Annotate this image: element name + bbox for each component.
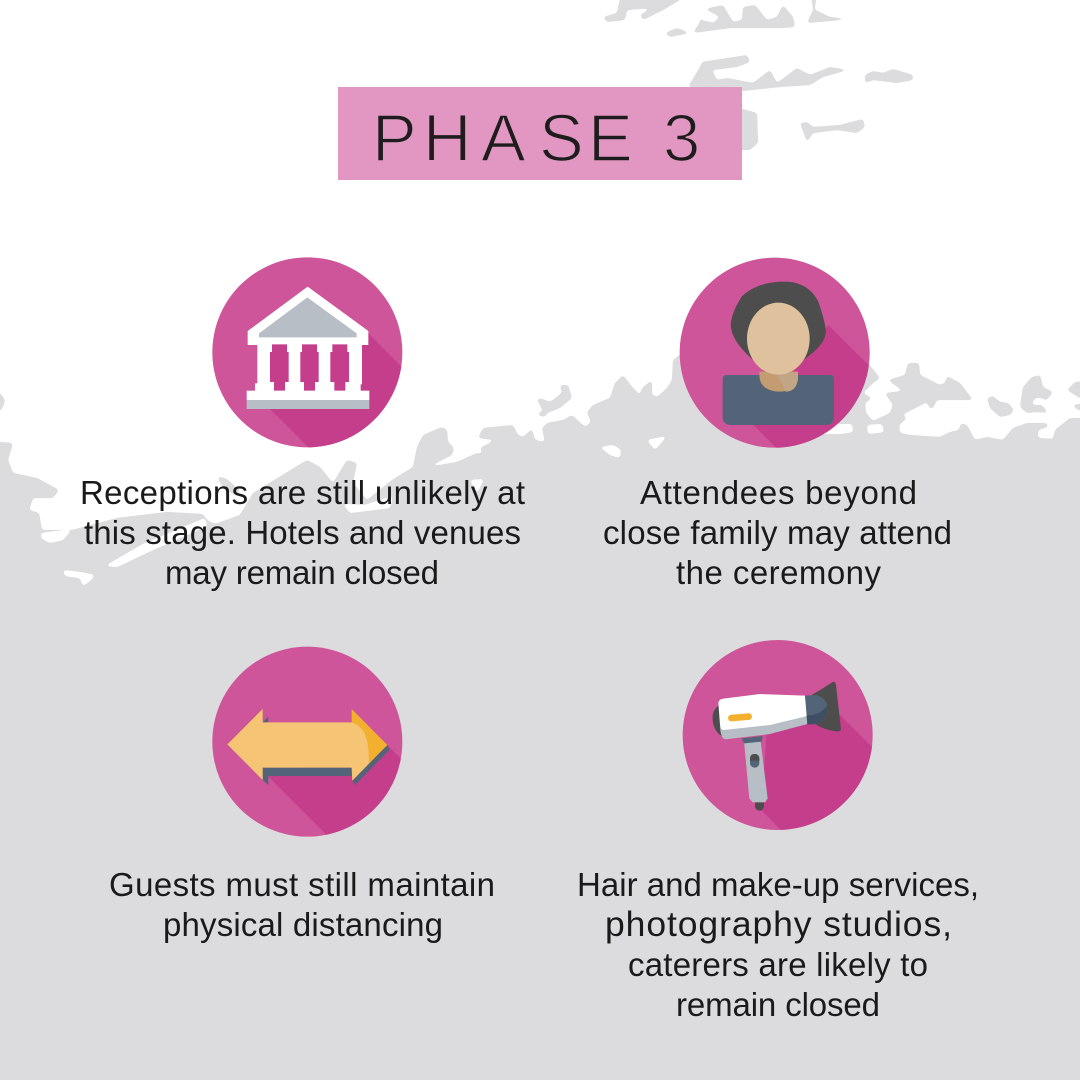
text: receptions: Receptions are still unlikely at [80,474,525,511]
text: receptions: may remain closed [165,554,439,591]
icon: hair dryer [682,640,873,830]
text: attendees: the ceremony [676,554,882,591]
text: receptions: this stage. Hotels and venues [84,514,521,551]
text: attendees [603,474,952,591]
text: guests: physical distancing [163,906,443,943]
text: hair and make-up: photography studios, [605,904,952,944]
text: guests [109,866,495,943]
text: hair and make-up [577,866,979,1023]
text: hair and make-up: caterers are likely to [628,946,928,983]
icon: bank building [212,257,402,448]
title text: PHASE 3 [372,101,700,176]
icon: guest portrait [680,258,870,448]
title banner [338,87,742,180]
text: receptions [80,474,525,591]
text: hair and make-up: Hair and make-up services, [577,866,979,903]
text: guests: Guests must still maintain [109,866,495,903]
text: attendees: close family may attend [603,514,952,551]
text: hair and make-up: remain closed [676,986,880,1023]
icon: double-headed distancing arrow [212,646,402,837]
text: attendees: Attendees beyond [640,474,917,511]
